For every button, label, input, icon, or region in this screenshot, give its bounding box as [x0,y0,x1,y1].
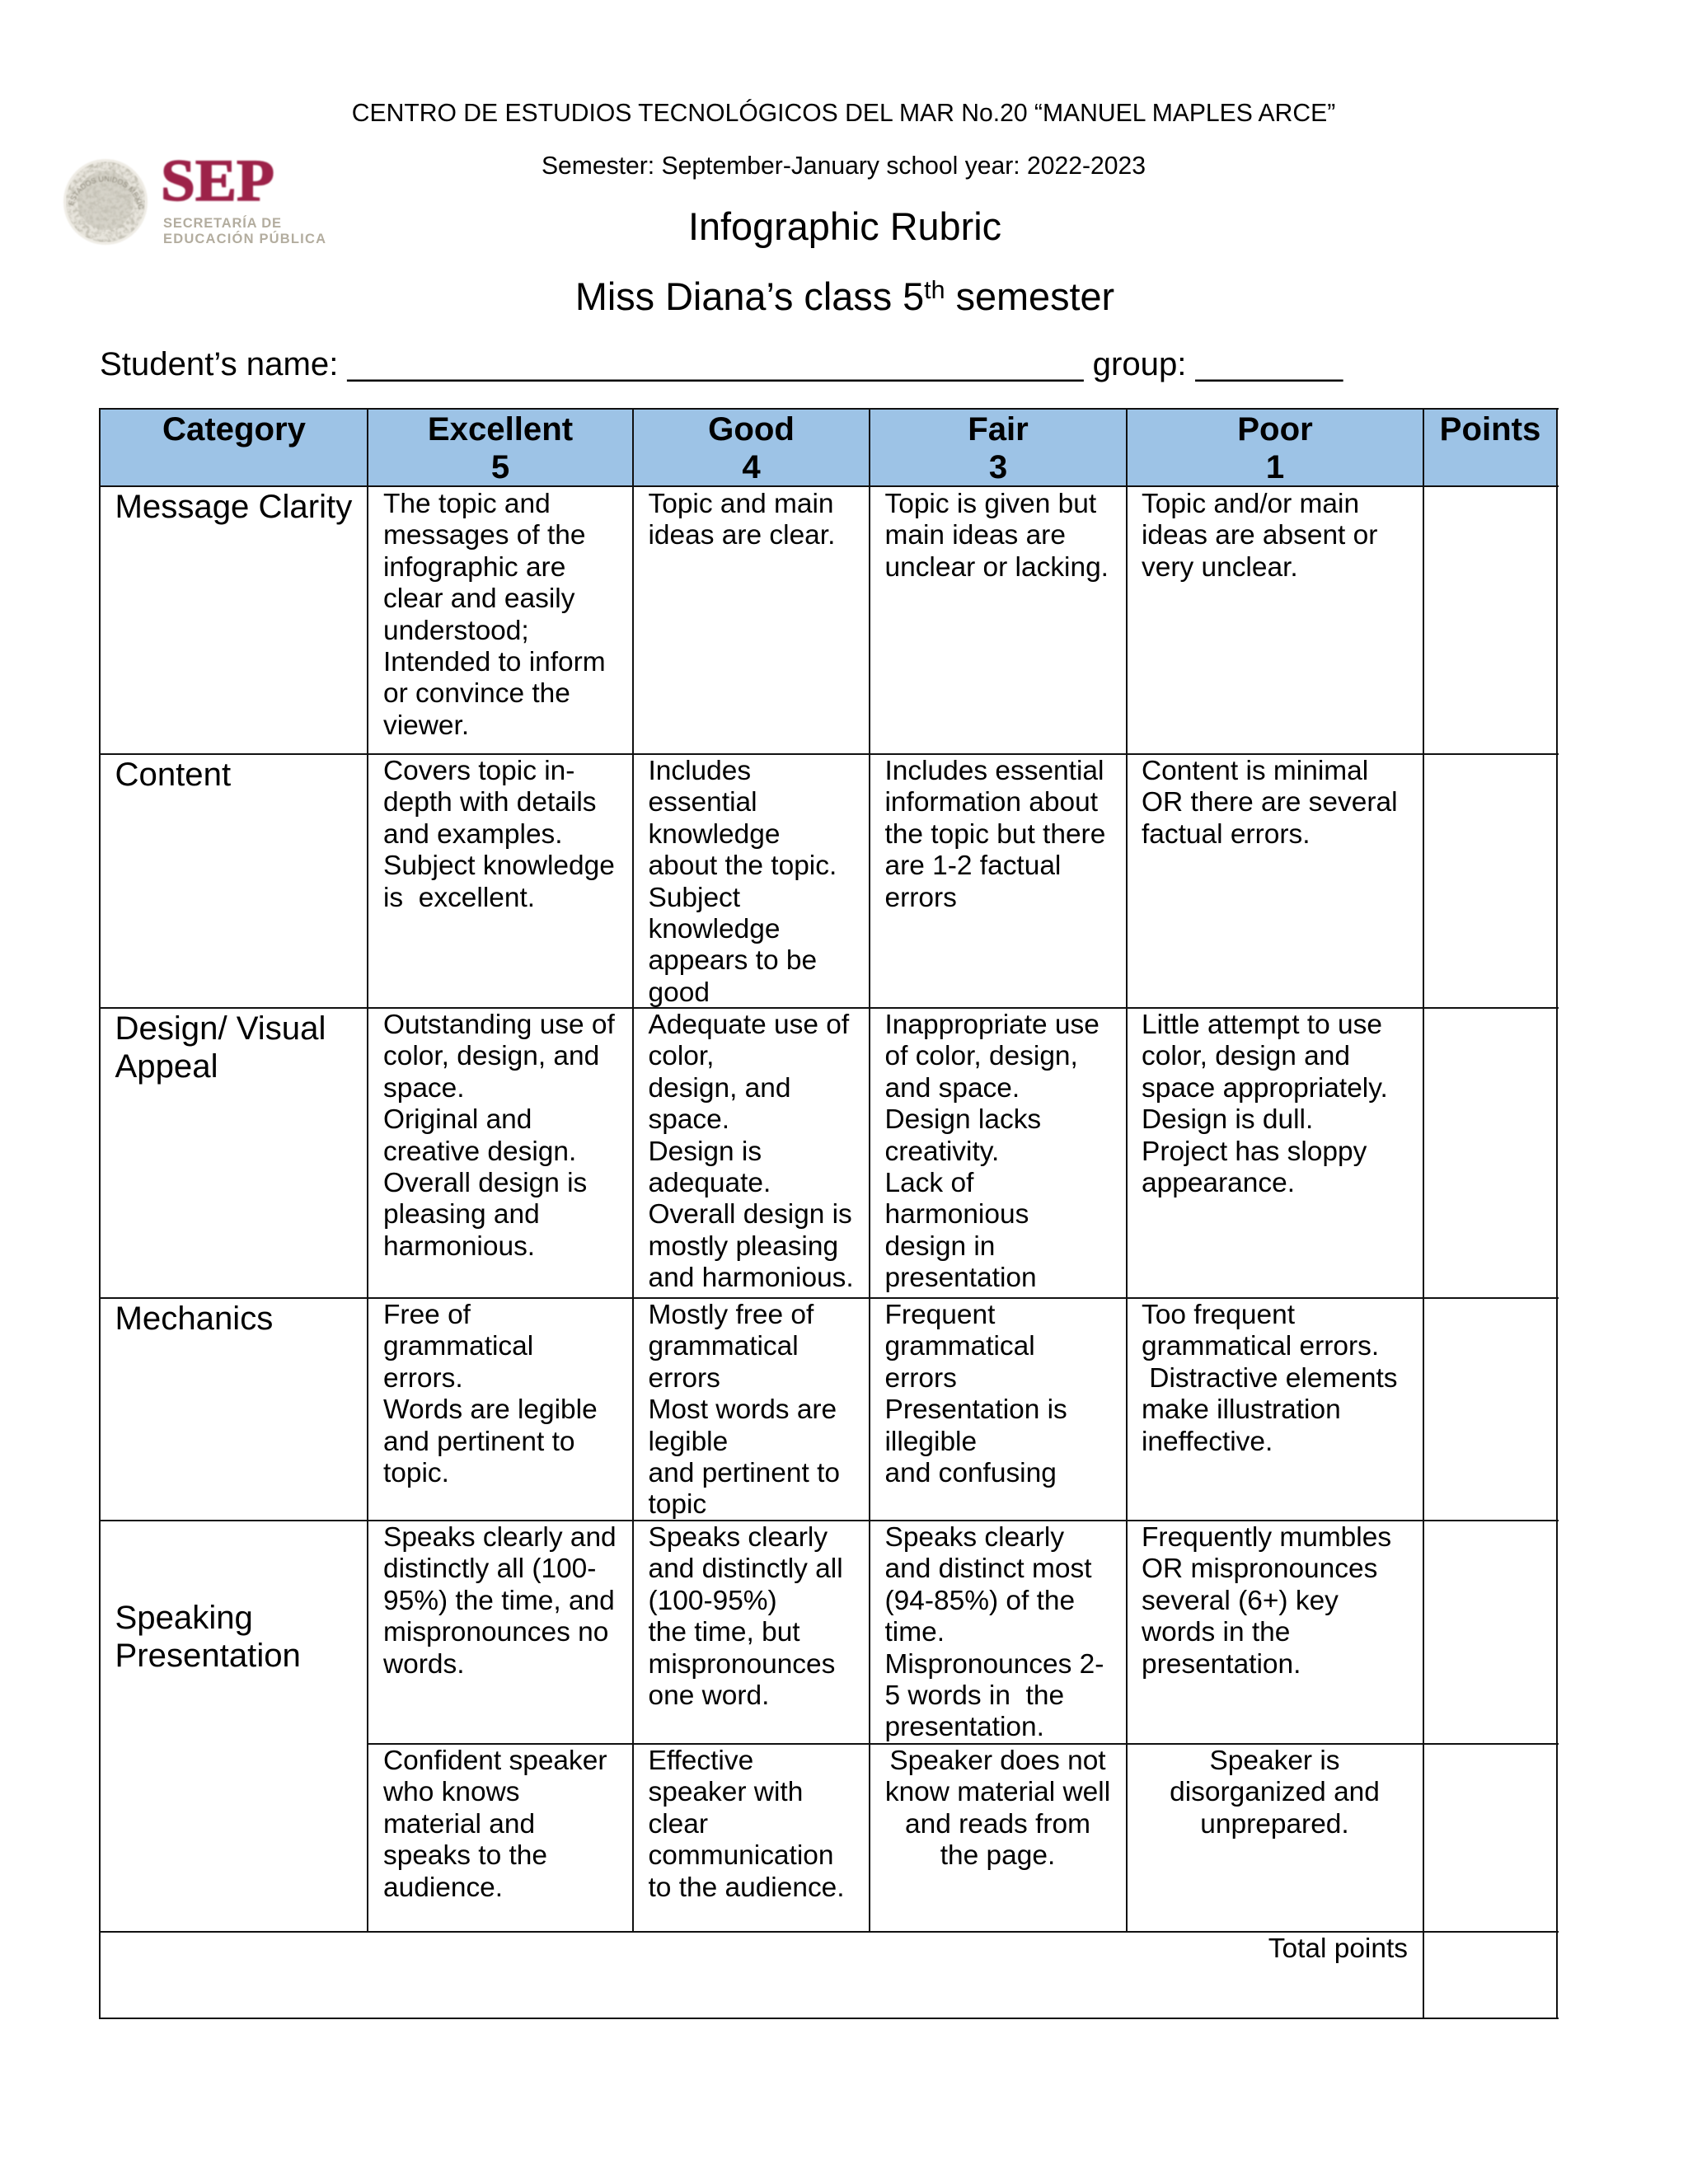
Design: Excellent: Outstanding use of [383,1010,615,1040]
header: Poor 1 [1237,410,1313,485]
Design: Fair: of color, design, [885,1041,1078,1071]
Design: Poor: Project has sloppy [1142,1137,1367,1167]
Design: Fair: Lack of [885,1168,973,1198]
Message Clarity: Excellent: viewer. [383,710,469,741]
Message Clarity: Excellent: Intended to inform [383,647,606,677]
Speaker confidence: Fair: the page. [940,1840,1055,1871]
Speaking clarity: Excellent: 95%) the time, and [383,1586,615,1616]
category: Speaking Presentation: Speaking [115,1599,253,1636]
Speaker confidence: Good: communication [648,1840,833,1871]
Speaker confidence: Poor: disorganized and [1170,1777,1380,1807]
Speaker confidence: Good: speaker with [648,1777,803,1807]
Mechanics: Excellent: and pertinent to [383,1427,575,1457]
subtitle: Miss Diana’s class 5th semester [575,275,1114,318]
logo subtitle line 1: SECRETARÍA DE [163,215,281,231]
Mechanics: Fair: Frequent [885,1300,995,1330]
Message Clarity: Excellent: The topic and [383,489,551,519]
Mechanics: Good: grammatical [648,1331,799,1361]
Speaking clarity: Excellent: Speaks clearly and [383,1522,617,1553]
Mechanics: Poor: grammatical errors. [1142,1331,1379,1361]
Design: Poor: space appropriately. [1142,1073,1388,1104]
Speaker confidence: Fair: and reads from [905,1809,1090,1840]
header: Poor 1: Poor [1237,410,1313,448]
Content: Poor: Content is minimal [1142,756,1368,786]
Mechanics: Excellent: Words are legible [383,1394,598,1425]
Speaking clarity: Good: Speaks clearly [648,1522,828,1553]
Design: Excellent: color, design, and [383,1041,599,1071]
category: Content: Content [115,756,231,793]
Design: Good: Adequate use of [648,1010,849,1040]
Speaker confidence: Good [648,1746,845,1903]
Design: Good: Overall design is [648,1199,852,1230]
Speaker confidence: Excellent [383,1746,607,1903]
Design: Good: and harmonious. [648,1263,854,1293]
Message Clarity: Fair [885,489,1109,583]
Design: Excellent: harmonious. [383,1231,535,1262]
Mechanics: Excellent: topic. [383,1458,449,1488]
Design: Good: space. [648,1104,729,1135]
header: Excellent 5: 5 [491,448,509,485]
Speaker confidence: Excellent: Confident speaker [383,1746,607,1776]
Content: Fair: information about [885,787,1098,818]
Speaking clarity: Poor: OR mispronounces [1142,1554,1377,1584]
Speaking clarity: Poor: words in the [1142,1617,1290,1647]
student name and group line: Student’s name: ________________________________________ group: ________ [100,345,1343,382]
Message Clarity: Good: Topic and main [648,489,834,519]
Mechanics: Good: Most words are [648,1394,837,1425]
icon: national seal [63,158,148,246]
header: Points: Points [1440,410,1540,448]
Content: Fair: Includes essential [885,756,1104,786]
Speaking clarity: Good: one word. [648,1680,769,1711]
title: Infographic Rubric [688,205,1001,248]
Speaking clarity: Excellent: mispronounces no [383,1617,608,1647]
Content: Good: about the topic. [648,851,837,881]
Speaking clarity: Poor: several (6+) key [1142,1586,1339,1616]
Design: Poor: appearance. [1142,1168,1295,1198]
Speaking clarity: Excellent: distinctly all (100- [383,1554,596,1584]
header: Good 4: 4 [742,448,761,485]
Speaking clarity: Fair: 5 words in the [885,1680,1064,1711]
Message Clarity: Fair: main ideas are [885,520,1066,551]
Speaker confidence: Excellent: audience. [383,1872,503,1903]
Mechanics: Good: and pertinent to [648,1458,840,1488]
Design: Poor: Little attempt to use [1142,1010,1382,1040]
Content: Excellent: is excellent. [383,883,535,913]
Content: Good [648,756,837,1008]
Mechanics: Good: Mostly free of [648,1300,814,1330]
Design: Good: mostly pleasing [648,1231,838,1262]
logo wordmark: SEP [161,148,274,213]
Content: Fair: the topic but there [885,819,1105,850]
Message Clarity: Excellent: or convince the [383,678,570,709]
Mechanics: Poor: ineffective. [1142,1427,1273,1457]
Speaking clarity: Good: and distinctly all [648,1554,843,1584]
Message Clarity: Fair: Topic is given but [885,489,1096,519]
Design: Fair: presentation [885,1263,1037,1293]
Content: Good: good [648,977,710,1008]
Message Clarity: Excellent [383,489,606,741]
school name: CENTRO DE ESTUDIOS TECNOLÓGICOS DEL MAR No.20 “MANUEL MAPLES ARCE” [352,100,1335,127]
category: Mechanics: Mechanics [115,1300,273,1337]
Speaking clarity: Good: the time, but [648,1617,800,1647]
Content: Excellent: and examples. [383,819,563,850]
Mechanics: Poor [1142,1300,1397,1457]
Speaking clarity: Excellent: words. [383,1649,465,1680]
rubric table [99,408,1559,2019]
Message Clarity: Excellent: understood; [383,616,529,646]
Speaking clarity: Fair: and distinct most [885,1554,1092,1584]
Design: Fair: design in [885,1231,995,1262]
Mechanics: Poor: make illustration [1142,1394,1341,1425]
Speaking clarity: Good: (100-95%) [648,1586,777,1616]
Design: Excellent [383,1010,615,1262]
Message Clarity: Fair: unclear or lacking. [885,552,1109,583]
Speaking clarity: Poor: presentation. [1142,1649,1301,1680]
Message Clarity: Good [648,489,835,551]
header: Good 4: Good [708,410,795,448]
category: Speaking Presentation: Presentation [115,1637,301,1674]
Mechanics: Fair: errors [885,1363,957,1394]
Message Clarity: Excellent: infographic are [383,552,565,583]
header: Excellent 5: Excellent [428,410,573,448]
Mechanics: Fair: illegible [885,1427,977,1457]
Design: Poor: Design is dull. [1142,1104,1313,1135]
Message Clarity: Poor: Topic and/or main [1142,489,1359,519]
header: Good 4 [708,410,795,485]
Mechanics: Poor: Distractive elements [1149,1363,1397,1394]
Speaker confidence: Poor: unprepared. [1200,1809,1349,1840]
Speaker confidence: Fair: Speaker does not [889,1746,1106,1776]
category: Message Clarity: Message Clarity [115,488,352,525]
category: Speaking Presentation [115,1599,301,1674]
header: Excellent 5 [428,410,573,485]
Design: Fair: Inappropriate use [885,1010,1100,1040]
Message Clarity: Excellent: messages of the [383,520,585,551]
Message Clarity: Excellent: clear and easily [383,583,574,614]
Mechanics: Excellent: errors. [383,1363,463,1394]
Content: Poor: factual errors. [1142,819,1311,850]
Content: Fair [885,756,1105,913]
Mechanics: Good: errors [648,1363,720,1394]
category: Design / Visual Appeal: Design/ Visual [115,1010,326,1047]
Speaking clarity: Fair: Speaks clearly [885,1522,1064,1553]
Mechanics: Excellent: Free of [383,1300,471,1330]
Speaker confidence: Good: Effective [648,1746,753,1776]
Message Clarity: Good: ideas are clear. [648,520,835,551]
Content: Good: knowledge [648,914,780,944]
Design: Excellent: creative design. [383,1137,576,1167]
header: Fair 3: Fair [968,410,1029,448]
Design: Fair: Design lacks [885,1104,1041,1135]
table header background [101,409,1557,487]
Speaker confidence: Excellent: speaks to the [383,1840,547,1871]
Speaking clarity: Poor [1142,1522,1391,1680]
header: Category: Category [162,410,306,448]
Content: Good: appears to be [648,945,817,976]
Speaker confidence: Fair: know material well [885,1777,1110,1807]
Speaking clarity: Fair: (94-85%) of the [885,1586,1075,1616]
Speaking clarity: Good [648,1522,843,1711]
semester line: Semester: September-January school year: 2022-2023 [542,152,1146,180]
Mechanics: Excellent: grammatical [383,1331,533,1361]
Mechanics: Fair: Presentation is [885,1394,1067,1425]
Speaking clarity: Fair [885,1522,1104,1742]
Design: Excellent: Original and [383,1104,532,1135]
Design: Good [648,1010,854,1293]
Design: Excellent: Overall design is [383,1168,587,1198]
Speaking clarity: Fair: Mispronounces 2- [885,1649,1104,1680]
Speaker confidence: Poor [1170,1746,1380,1840]
Content: Good: essential [648,787,757,818]
Speaking clarity: Excellent [383,1522,617,1680]
Design: Fair: and space. [885,1073,1020,1104]
Design: Fair: harmonious [885,1199,1029,1230]
Message Clarity: Poor [1142,489,1377,583]
Speaker confidence: Excellent: who knows [383,1777,519,1807]
Content: Fair: are 1-2 factual [885,851,1061,881]
Speaking clarity: Fair: time. [885,1617,945,1647]
Design: Good: design, and [648,1073,790,1104]
Speaker confidence: Fair [885,1746,1110,1871]
Design: Fair [885,1010,1100,1293]
Design: Excellent: pleasing and [383,1199,540,1230]
Content: Excellent [383,756,615,913]
header: Fair 3 [968,410,1029,485]
Message Clarity: Poor: very unclear. [1142,552,1298,583]
category: Design / Visual Appeal: Appeal [115,1047,218,1085]
header: Poor 1: 1 [1266,448,1284,485]
Content: Good: Includes [648,756,751,786]
Mechanics: Good: legible [648,1427,728,1457]
Content: Fair: errors [885,883,957,913]
Content: Poor [1142,756,1398,850]
category: Design / Visual Appeal [115,1010,326,1085]
Content: Excellent: depth with details [383,787,597,818]
Speaking clarity: Fair: presentation. [885,1712,1044,1742]
Design: Good: adequate. [648,1168,771,1198]
Mechanics: Fair: and confusing [885,1458,1057,1488]
Mechanics: Good [648,1300,840,1520]
Mechanics: Fair: grammatical [885,1331,1035,1361]
Mechanics: Excellent [383,1300,598,1488]
Mechanics: Poor: Too frequent [1142,1300,1295,1330]
Content: Poor: OR there are several [1142,787,1398,818]
logo: SEP Secretaría de Educación Pública [63,148,326,246]
Message Clarity: Poor: ideas are absent or [1142,520,1377,551]
Speaker confidence: Good: to the audience. [648,1872,845,1903]
header: Fair 3: 3 [989,448,1007,485]
Design: Good: color, [648,1041,714,1071]
Mechanics: Fair [885,1300,1067,1488]
Content: Excellent: Covers topic in- [383,756,574,786]
Speaking clarity: Poor: Frequently mumbles [1142,1522,1391,1553]
Content: Excellent: Subject knowledge [383,851,615,881]
Speaker confidence: Good: clear [648,1809,708,1840]
total points label: Total points [1268,1933,1408,1964]
Speaking clarity: Good: mispronounces [648,1649,835,1680]
Design: Poor [1142,1010,1388,1198]
Design: Poor: color, design and [1142,1041,1350,1071]
Design: Good: Design is [648,1137,762,1167]
Content: Good: knowledge [648,819,780,850]
Speaker confidence: Excellent: material and [383,1809,535,1840]
Speaker confidence: Poor: Speaker is [1209,1746,1340,1776]
Design: Fair: creativity. [885,1137,999,1167]
Mechanics: Good: topic [648,1489,706,1520]
logo subtitle line 2: EDUCACIÓN PÚBLICA [163,231,326,246]
Content: Good: Subject [648,883,740,913]
Design: Excellent: space. [383,1073,465,1104]
